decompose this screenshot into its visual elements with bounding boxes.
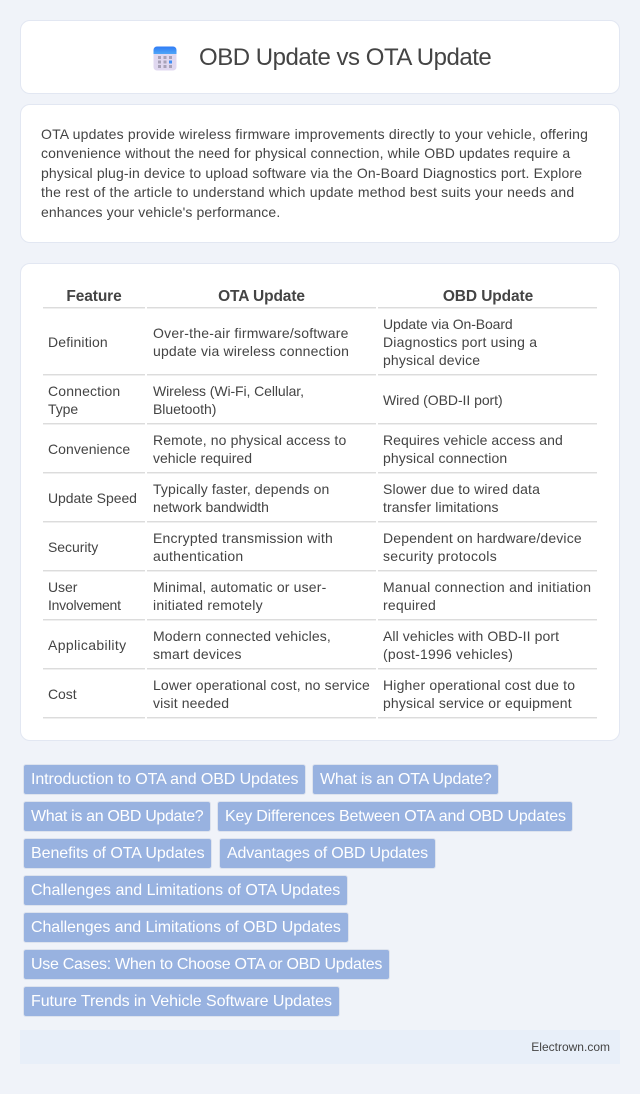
row: applicability: All vehicles with OBD-II port <box>383 628 559 644</box>
tag: OTA challenges: Challenges and Limitations of OTA Updates <box>31 882 340 899</box>
tag: use cases: Use Cases: When to Choose OTA or OBD Updates <box>31 956 382 973</box>
tag: benefits <box>23 838 212 869</box>
row: user involvement: Involvement <box>48 597 121 613</box>
row: user involvement: User <box>48 579 77 595</box>
row: connection type: Bluetooth) <box>153 401 216 417</box>
row: definition: Definition <box>48 334 108 350</box>
row: security: Dependent on hardware/device <box>383 530 582 546</box>
row: user involvement: required <box>383 597 436 613</box>
intro paragraph: physical plug-in device to upload software via the On-Board Diagnostics port. Explore <box>41 165 582 181</box>
intro paragraph: OTA updates provide wireless firmware improvements directly to your vehicle, offering <box>41 126 588 142</box>
topic tags <box>23 764 573 1017</box>
title: OBD Update vs OTA Update <box>199 44 491 71</box>
intro paragraph: enhances your vehicle's performance. <box>41 204 280 220</box>
row: update speed: Update Speed <box>48 490 137 506</box>
intro paragraph <box>41 126 588 220</box>
row: applicability: Modern connected vehicles, <box>153 628 331 644</box>
row: cost: physical service or equipment <box>383 695 572 711</box>
row: user involvement: initiated remotely <box>153 597 263 613</box>
row: applicability <box>48 628 559 662</box>
tag: introduction: Introduction to OTA and OBD Updates <box>31 771 298 788</box>
row: cost: Cost <box>48 686 77 702</box>
tag: key differences: Key Differences Between OTA and OBD Updates <box>225 808 566 825</box>
row: connection type <box>48 383 503 417</box>
row: connection type: Type <box>48 401 78 417</box>
row: convenience: Remote, no physical access to <box>153 432 346 448</box>
intro paragraph: the rest of the article to understand which update method best suits your needs and <box>41 184 574 200</box>
tag: key differences <box>217 801 573 832</box>
row: user involvement <box>48 579 591 613</box>
tag: what is OBD: What is an OBD Update? <box>31 808 203 825</box>
intro text panel <box>20 104 620 243</box>
tag: OBD challenges: Challenges and Limitations of OBD Updates <box>31 919 341 936</box>
footer credit: Electrown.com <box>531 1040 610 1054</box>
row: convenience <box>48 432 563 466</box>
tag: use cases <box>23 949 390 980</box>
row: applicability: Applicability <box>48 637 126 653</box>
footer bar <box>20 1030 620 1064</box>
tag: what is OTA <box>312 764 499 795</box>
row: definition: physical device <box>383 352 480 368</box>
icon: calendar <box>154 46 176 70</box>
row: security: Security <box>48 539 98 555</box>
row: applicability: (post-1996 vehicles) <box>383 646 513 662</box>
tag: future trends <box>23 986 340 1017</box>
table header: OBD update: OBD Update <box>443 288 533 305</box>
tag: future trends: Future Trends in Vehicle Software Updates <box>31 993 332 1010</box>
row: security: Encrypted transmission with <box>153 530 333 546</box>
row: convenience: Convenience <box>48 441 130 457</box>
row: connection type: Connection <box>48 383 120 399</box>
table header: feature: Feature <box>66 288 122 305</box>
row: convenience: Requires vehicle access and <box>383 432 563 448</box>
row: user involvement: Manual connection and initiation <box>383 579 591 595</box>
row: update speed: Slower due to wired data <box>383 481 540 497</box>
tag: introduction <box>23 764 306 795</box>
tag: advantages: Advantages of OBD Updates <box>227 845 428 862</box>
tag: OTA challenges <box>23 875 348 906</box>
comparison table panel <box>20 263 620 741</box>
row: definition: Update via On-Board <box>383 316 513 332</box>
row: security <box>48 530 582 564</box>
row: update speed <box>48 481 540 515</box>
table header: OTA update: OTA Update <box>218 288 305 305</box>
row: update speed: network bandwidth <box>153 499 269 515</box>
row: update speed: transfer limitations <box>383 499 499 515</box>
header panel <box>20 20 620 94</box>
tag: what is OTA: What is an OTA Update? <box>320 771 492 788</box>
row: connection type: Wired (OBD-II port) <box>383 392 503 408</box>
comparison table <box>43 288 597 719</box>
tag: benefits: Benefits of OTA Updates <box>31 845 205 862</box>
row: convenience: physical connection <box>383 450 507 466</box>
row: cost: Lower operational cost, no service <box>153 677 370 693</box>
row: definition: Diagnostics port using a <box>383 334 537 350</box>
row: convenience: vehicle required <box>153 450 252 466</box>
row: connection type: Wireless (Wi-Fi, Cellular, <box>153 383 304 399</box>
row: security: security protocols <box>383 548 497 564</box>
row: definition: Over-the-air firmware/software <box>153 325 349 341</box>
row: update speed: Typically faster, depends on <box>153 481 329 497</box>
row: applicability: smart devices <box>153 646 242 662</box>
row: cost: Higher operational cost due to <box>383 677 575 693</box>
row: cost: visit needed <box>153 695 229 711</box>
row: user involvement: Minimal, automatic or user- <box>153 579 326 595</box>
row: cost <box>48 677 575 711</box>
row: security: authentication <box>153 548 243 564</box>
tag: OBD challenges <box>23 912 349 943</box>
tag: what is OBD <box>23 801 211 832</box>
tag: advantages <box>219 838 436 869</box>
intro paragraph: convenience without the need for physical connection, while OBD updates require a <box>41 145 570 161</box>
row: definition: update via wireless connection <box>153 343 349 359</box>
row: definition <box>48 316 538 368</box>
